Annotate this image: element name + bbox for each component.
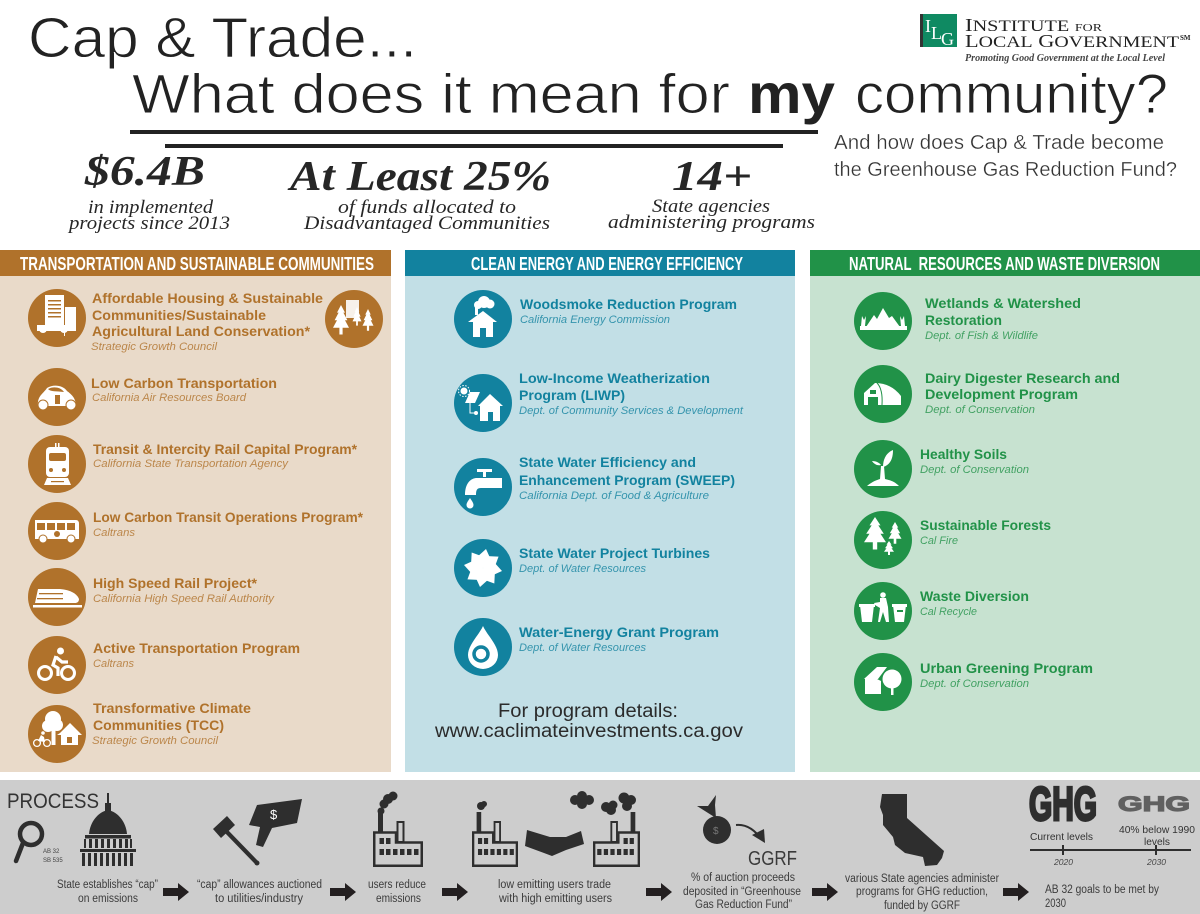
logo: Institute for Local Government: LOCAL G OVERNMENT bbox=[965, 31, 1179, 51]
item: woodsmoke reduction: Woodsmoke Reduction Program bbox=[520, 296, 737, 312]
item: low carbon transportation: California Air Resources Board bbox=[92, 392, 247, 404]
item: water project turbines bbox=[454, 539, 710, 597]
item: healthy soils bbox=[854, 440, 1029, 498]
item: affordable housing bbox=[28, 289, 383, 353]
subtitle question: the Greenhouse Gas Reduction Fund? bbox=[834, 159, 1177, 181]
chart: GHG timeline 2020 to 2030: 2030 bbox=[1146, 858, 1167, 867]
icon: capitol building bbox=[80, 793, 136, 866]
arrow: step 5 to 6 bbox=[812, 883, 838, 901]
stat: 6.4B implemented: in implemented bbox=[88, 197, 214, 218]
step text: users reduce bbox=[368, 879, 426, 905]
item: dairy digester: Development Program bbox=[925, 386, 1078, 402]
item: low carbon transit operations bbox=[28, 502, 364, 560]
arrow: step 6 to 7 bbox=[1003, 883, 1029, 901]
step text: allowances auctioned: to utilities/industry bbox=[215, 893, 303, 905]
item: affordable housing: Communities/Sustainable bbox=[92, 307, 266, 323]
icon: magnifying glass bbox=[16, 823, 63, 864]
item: low-income weatherization bbox=[454, 370, 744, 432]
item: woodsmoke reduction bbox=[454, 290, 737, 348]
chart: GHG timeline 2020 to 2030: GHG bbox=[1118, 793, 1190, 816]
stat: at least 25 percent: At Least 25% bbox=[287, 154, 551, 200]
chart: GHG timeline 2020 to 2030: 2020 bbox=[1053, 858, 1074, 867]
logo: Institute for Local Government bbox=[920, 14, 1191, 64]
item: active transportation: Active Transportation Program bbox=[93, 640, 300, 656]
item: low-income weatherization: Program (LIWP) bbox=[519, 387, 625, 403]
logo: Institute for Local Government: I bbox=[925, 16, 931, 36]
title: Cap & Trade... bbox=[28, 6, 417, 70]
icon: factory reducing emissions bbox=[374, 792, 422, 866]
item: water efficiency SWEEP: California Dept. of Food & Agriculture bbox=[519, 490, 709, 502]
step text: auction proceeds: deposited in “Greenhouse bbox=[683, 886, 801, 898]
stat: 6.4B implemented: projects since 2013 bbox=[67, 213, 230, 234]
step text: state agencies administer bbox=[845, 873, 999, 912]
item: transit and intercity rail: California State Transportation Agency bbox=[93, 458, 290, 470]
step text: allowances auctioned: “cap” allowances auctioned bbox=[197, 879, 322, 891]
icon: gavel and bid paddle: $ bbox=[270, 807, 278, 822]
item: active transportation: Caltrans bbox=[93, 658, 134, 670]
step text: low emitting users trade: with high emitting users bbox=[498, 893, 612, 905]
chart: GHG timeline 2020 to 2030: GHG bbox=[1029, 777, 1097, 830]
panel: transportation and sustainable communities bbox=[0, 250, 391, 772]
item: water project turbines: State Water Project Turbines bbox=[519, 545, 710, 561]
item: wetlands and watershed: Dept. of Fish & Wildlife bbox=[925, 330, 1038, 342]
item: sustainable forests: Sustainable Forests bbox=[920, 517, 1051, 533]
chart: GHG timeline 2020 to 2030 bbox=[1029, 777, 1195, 867]
item: water-energy grant: Dept. of Water Resources bbox=[519, 642, 646, 654]
item: low-income weatherization: Low-Income Weatherization bbox=[519, 370, 710, 386]
item: high speed rail: California High Speed Rail Authority bbox=[93, 593, 276, 605]
program details link: www.caclimateinvestments.ca.gov bbox=[434, 721, 744, 742]
item: affordable housing: Affordable Housing & Sustainable bbox=[92, 290, 323, 306]
step text: auction proceeds: % of auction proceeds bbox=[691, 872, 795, 884]
step text: state establishes cap: State establishes “cap” bbox=[57, 879, 158, 891]
item: water efficiency SWEEP bbox=[454, 454, 735, 516]
step text: users reduce: users reduce bbox=[368, 879, 426, 891]
item: transformative climate communities bbox=[28, 700, 251, 763]
item: urban greening: Dept. of Conservation bbox=[920, 678, 1029, 690]
item: transit and intercity rail bbox=[28, 435, 358, 493]
item: affordable housing: Strategic Growth Council bbox=[91, 341, 218, 353]
step text: state agencies administer: various State agencies administer bbox=[845, 873, 999, 885]
title bbox=[28, 6, 1168, 148]
step text: low emitting users trade bbox=[498, 879, 612, 905]
step text: state establishes cap bbox=[57, 879, 158, 905]
item: low carbon transportation bbox=[28, 368, 277, 426]
item: affordable housing: Agricultural Land Conservation* bbox=[92, 323, 311, 339]
item: wetlands and watershed bbox=[854, 292, 1081, 350]
logo: Institute for Local Government: L bbox=[931, 23, 942, 43]
item: woodsmoke reduction: California Energy Commission bbox=[520, 314, 670, 326]
stat: 14+ state agencies bbox=[608, 154, 815, 233]
stat: 14+ state agencies: 14+ bbox=[672, 154, 752, 200]
arrow: step 4 to 5 bbox=[646, 883, 672, 901]
item: active transportation bbox=[28, 636, 300, 694]
icon: factories trading with handshake bbox=[473, 791, 639, 866]
item: waste diversion: Waste Diversion bbox=[920, 588, 1029, 604]
item: low carbon transit operations: Low Carbon Transit Operations Program* bbox=[93, 509, 364, 525]
step text: state agencies administer: programs for GHG reduction, bbox=[856, 886, 988, 898]
step text: users reduce: emissions bbox=[376, 893, 421, 905]
stat: 6.4B implemented bbox=[67, 149, 230, 234]
chart: GHG timeline 2020 to 2030: Current levels bbox=[1030, 831, 1093, 843]
title: my bbox=[748, 62, 835, 125]
chart: GHG timeline 2020 to 2030: levels bbox=[1144, 836, 1170, 848]
item: water project turbines: Dept. of Water Resources bbox=[519, 563, 646, 575]
icon: magnifying glass: SB 535 bbox=[43, 858, 63, 864]
logo: Institute for Local Government: SM bbox=[1180, 34, 1191, 42]
arrow: step 2 to 3 bbox=[330, 883, 356, 901]
item: urban greening bbox=[854, 653, 1093, 711]
step text: AB 32 goals: AB 32 goals to be met by bbox=[1045, 884, 1159, 896]
chart: GHG timeline 2020 to 2030: 40% below 1990 bbox=[1119, 824, 1195, 836]
panel: natural resources and waste diversion bbox=[810, 250, 1200, 772]
step text: state establishes cap: on emissions bbox=[78, 893, 138, 905]
step text: AB 32 goals bbox=[1045, 884, 1159, 910]
icon: money bag to GGRF: GGRF bbox=[748, 848, 797, 870]
arrow: step 1 to 2 bbox=[163, 883, 189, 901]
stat: 14+ state agencies: State agencies bbox=[652, 196, 770, 217]
subtitle question bbox=[834, 132, 1177, 181]
title: What does it mean for bbox=[132, 62, 730, 125]
item: dairy digester: Dairy Digester Research and bbox=[925, 370, 1120, 386]
step text: low emitting users trade: low emitting users trade bbox=[498, 879, 611, 891]
item: sustainable forests bbox=[854, 511, 1051, 569]
item: waste diversion bbox=[854, 582, 1029, 640]
logo: Institute for Local Government: INSTITUTE FOR bbox=[965, 15, 1103, 35]
panel heading: transportation: TRANSPORTATION AND SUSTAINABLE COMMUNITIES bbox=[20, 254, 374, 274]
stat: 14+ state agencies: administering programs bbox=[608, 212, 815, 233]
item: transformative climate communities: Communities (TCC) bbox=[93, 717, 224, 733]
item: water efficiency SWEEP: State Water Efficiency and bbox=[519, 454, 696, 470]
stat: at least 25 percent bbox=[287, 154, 551, 234]
item: high speed rail: High Speed Rail Project* bbox=[93, 575, 258, 591]
icon: money bag to GGRF: $ bbox=[713, 826, 719, 837]
icon: gavel and bid paddle bbox=[213, 799, 302, 866]
step text: auction proceeds: Gas Reduction Fund” bbox=[695, 899, 792, 911]
item: transformative climate communities: Strategic Growth Council bbox=[92, 735, 219, 747]
panel: process strip bbox=[0, 777, 1200, 914]
item: low carbon transit operations: Caltrans bbox=[93, 527, 136, 539]
program details link bbox=[434, 701, 744, 742]
arrow: step 3 to 4 bbox=[442, 883, 468, 901]
stat: at least 25 percent: of funds allocated to bbox=[338, 197, 516, 218]
item: wetlands and watershed: Wetlands & Watershed bbox=[925, 295, 1081, 311]
step text: auction proceeds bbox=[683, 872, 801, 911]
stat: at least 25 percent: Disadvantaged Communities bbox=[303, 213, 550, 234]
panel: clean energy and energy efficiency bbox=[405, 250, 795, 772]
item: water efficiency SWEEP: Enhancement Program (SWEEP) bbox=[519, 472, 735, 488]
icon: magnifying glass: AB 32 bbox=[43, 849, 60, 855]
item: transit and intercity rail: Transit & Intercity Rail Capital Program* bbox=[93, 441, 358, 457]
item: transformative climate communities: Transformative Climate bbox=[93, 700, 251, 716]
stat: 6.4B implemented: $6.4B bbox=[84, 149, 205, 195]
step text: state agencies administer: funded by GGRF bbox=[884, 900, 960, 912]
logo: Institute for Local Government: G bbox=[941, 29, 954, 49]
item: sustainable forests: Cal Fire bbox=[920, 535, 958, 547]
item: healthy soils: Healthy Soils bbox=[920, 446, 1007, 462]
subtitle question: And how does Cap & Trade become bbox=[834, 132, 1164, 154]
item: water-energy grant: Water-Energy Grant Program bbox=[519, 624, 719, 640]
item: wetlands and watershed: Restoration bbox=[925, 312, 1002, 328]
item: urban greening: Urban Greening Program bbox=[920, 660, 1093, 676]
panel heading: clean energy: CLEAN ENERGY AND ENERGY EFFICIENCY bbox=[471, 254, 743, 274]
step text: AB 32 goals: 2030 bbox=[1045, 898, 1066, 910]
icon: California map bbox=[880, 794, 944, 866]
item: dairy digester bbox=[854, 365, 1120, 423]
item: healthy soils: Dept. of Conservation bbox=[920, 464, 1029, 476]
program details link: For program details: bbox=[498, 701, 678, 722]
item: waste diversion: Cal Recycle bbox=[920, 606, 977, 618]
item: high speed rail bbox=[28, 568, 276, 626]
title: community? bbox=[855, 62, 1168, 125]
item: water-energy grant bbox=[454, 618, 719, 676]
process heading: PROCESS bbox=[7, 790, 99, 813]
logo: Institute for Local Government: Promoting Good Government at the Local Level bbox=[965, 53, 1165, 64]
icon: money bag to GGRF bbox=[697, 795, 797, 870]
item: dairy digester: Dept. of Conservation bbox=[925, 404, 1035, 416]
step text: allowances auctioned bbox=[197, 879, 322, 905]
item: low-income weatherization: Dept. of Community Services & Development bbox=[519, 405, 744, 417]
item: low carbon transportation: Low Carbon Transportation bbox=[91, 375, 277, 391]
